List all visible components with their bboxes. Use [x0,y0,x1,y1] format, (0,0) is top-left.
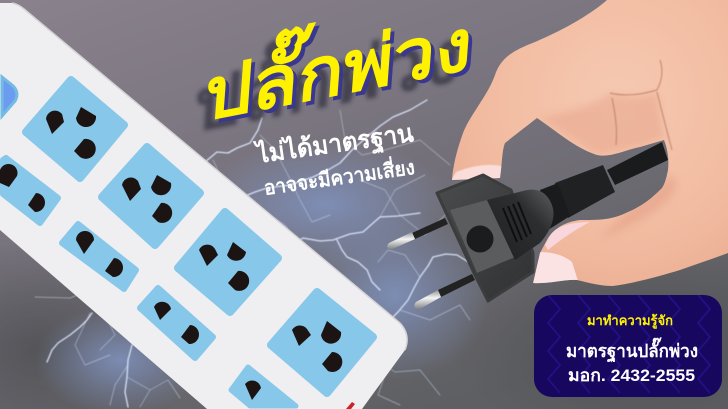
pin: bottom [414,274,475,310]
title [176,0,483,147]
power strip [0,3,407,409]
socket: large 2 [102,147,200,245]
title blue shadow: ปลั๊กพ่วง [192,0,482,139]
plug [387,142,668,310]
zigzag pattern [548,295,710,393]
subtitle line 2: อาจจะมีความเสี่ยง [262,152,416,200]
subtitle line 1: ไม่ได้มาตรฐาน [252,117,416,171]
strain relief [555,165,615,218]
hand [450,0,728,286]
grip ribs [503,202,531,242]
socket: small B [62,224,136,289]
pin: top [387,218,448,250]
back plate [437,175,533,301]
lightning bolts [35,100,470,407]
finger shading and creases [450,60,676,284]
title text: ปลั๊กพ่วง [189,0,478,135]
panel heading: มาทำความรู้จัก [587,313,673,329]
power switch [2,77,17,116]
strip body [0,3,407,409]
socket: large 1 [26,80,124,178]
cord [607,142,668,185]
grip dome [487,190,554,260]
red indicator [346,402,355,409]
centre hole [466,226,494,252]
standard number: มอก. 2432-2555 [568,366,695,385]
face plate [450,200,515,273]
socket: small C [140,288,213,358]
panel title: มาตรฐานปลั๊กพ่วง [566,337,698,363]
callout panel [534,295,722,397]
socket: small A [0,158,58,223]
title far shadow: ปลั๊กพ่วง [178,4,467,147]
socket: large 4 [271,292,373,393]
fingertip highlights [533,252,578,284]
socket: large 3 [178,212,278,312]
socket: small D [231,367,296,406]
subtitle [252,117,416,200]
